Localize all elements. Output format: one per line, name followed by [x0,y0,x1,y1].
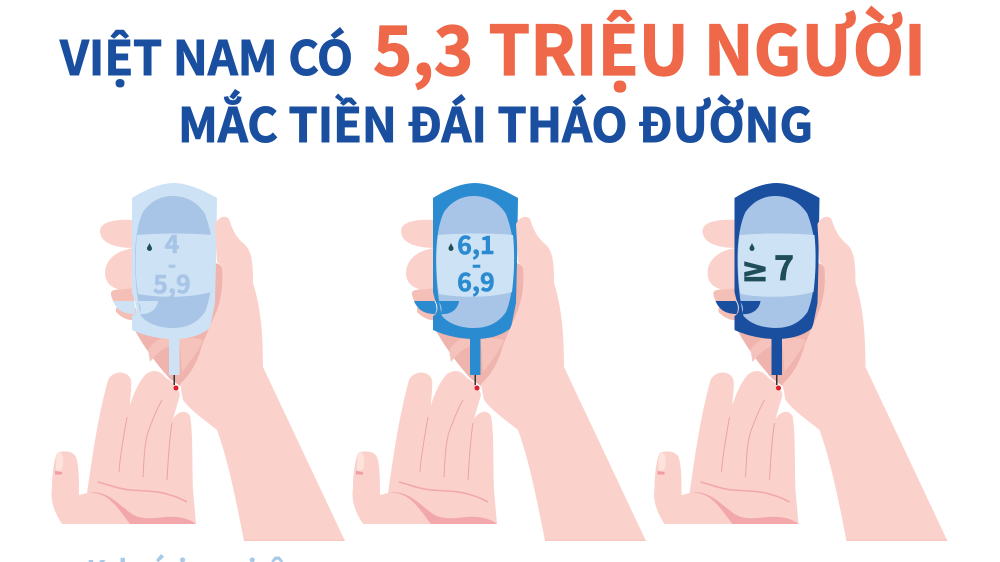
illustration: left open hand [654,371,798,524]
reading: 4 - 5,9: 4 [165,225,180,261]
illustration: right arm [782,217,948,541]
illustration: fingers holding meter [100,220,226,386]
illustration: fingers holding meter [702,220,828,386]
reading: 6,1 - 6,9: 6,9 [457,263,495,299]
panel: normal glucose meter 4 - 5,9 [51,183,345,541]
reading: at least 7 [741,241,794,290]
title line 1: lead: VIỆT NAM CÓ [59,20,353,89]
title line 2: MẮC TIỀN ĐÁI THÁO ĐƯỜNG [178,87,813,156]
reading: 4 - 5,9: 5,9 [153,265,191,301]
illustration: left open hand [51,371,196,524]
illustration: right arm [180,217,345,541]
reading: 4 - 5,9 [153,225,191,301]
icon: mid blue glucose meter [414,183,518,390]
panel: prediabetes glucose meter 6,1 - 6,9 [352,183,646,541]
reading: at least 7: 7 [774,241,794,290]
illustration: left open hand [352,371,497,524]
reading: at least 7: ≥ [741,250,769,289]
illustration: right arm [481,217,646,541]
icon: dark blue glucose meter [716,183,820,390]
reading: 6,1 - 6,9: 6,1 [457,226,495,262]
title [59,0,926,156]
panel: diabetes glucose meter at least 7 [654,183,948,541]
illustration: fingers holding meter [401,220,527,386]
icon: light blue glucose meter [113,183,217,390]
reading: 6,1 - 6,9 [457,226,495,299]
